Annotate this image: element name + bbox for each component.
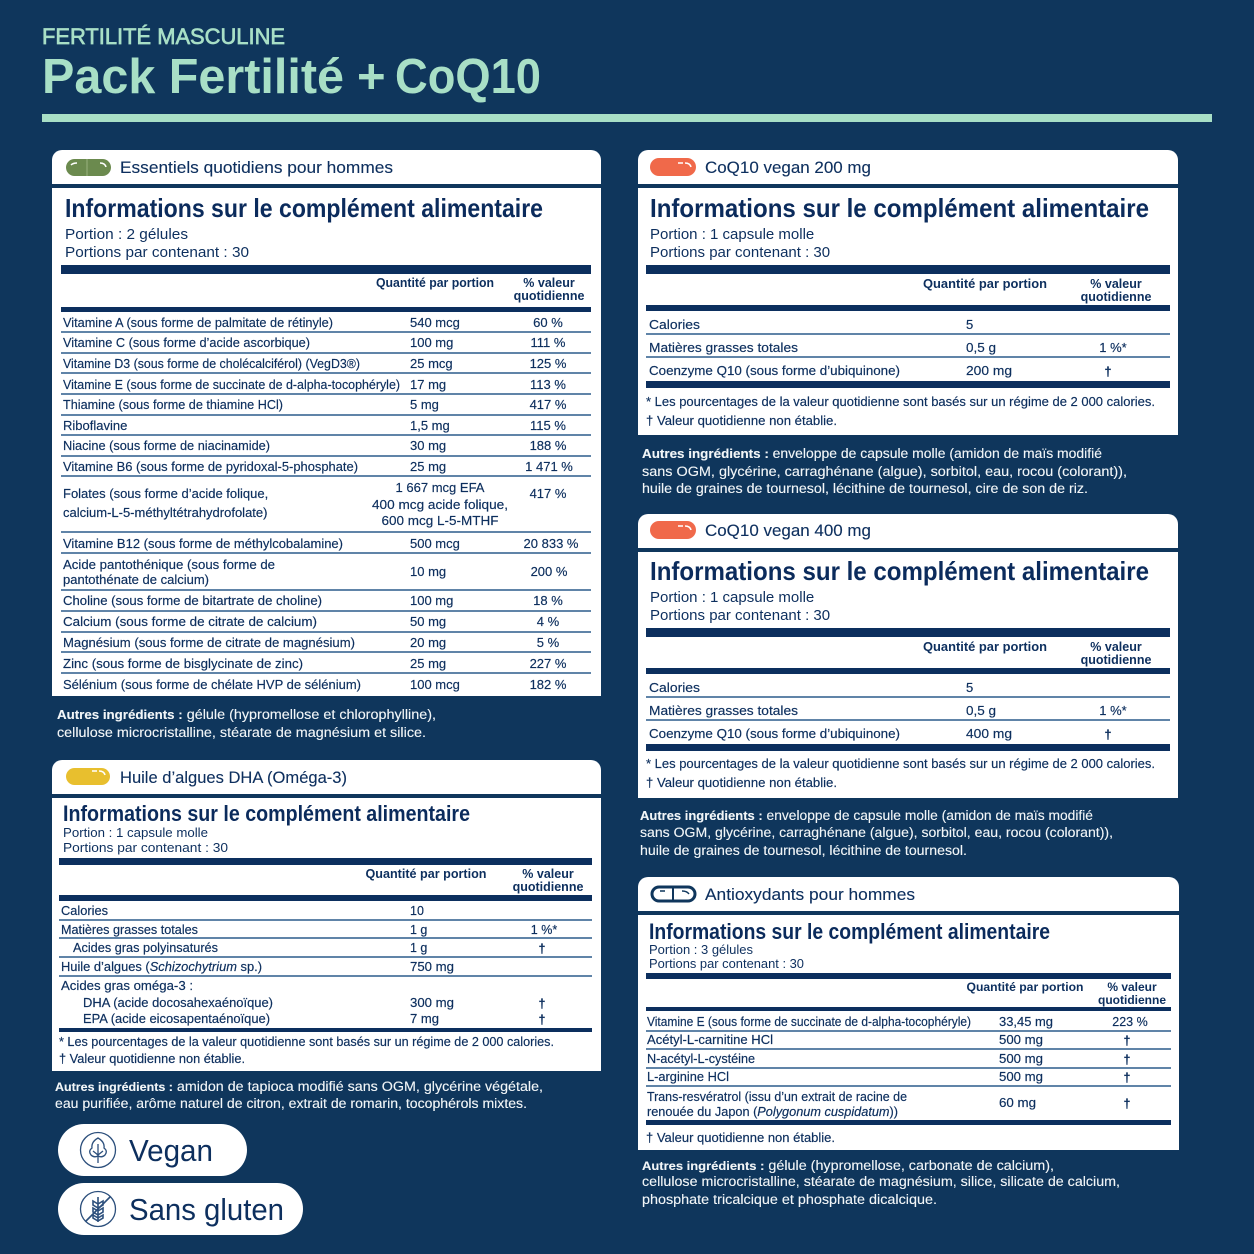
supplement facts table: Essentiels quotidiens: 227 % [530,656,567,671]
supplement facts table: Antioxydants: † [1124,1053,1131,1067]
supplement facts table: Essentiels quotidiens: 100 mg [410,335,453,350]
supplement facts table: Antioxydants: Acétyl-L-carnitine HCl [647,1033,773,1047]
supplement facts table: Essentiels quotidiens: 25 mg [410,459,446,474]
supplement facts table: Huile d'algues: 750 mg [410,960,454,974]
supplement facts table: Huile d'algues: EPA (acide eicosapentaénoïque) [83,1012,270,1026]
supplement facts table: Essentiels quotidiens [52,188,601,696]
supplement facts table: Huile d'algues: † [539,1013,546,1027]
supplement facts table: Essentiels quotidiens: quotidienne [514,289,584,303]
other ingredients: CoQ10 400 mg [640,808,1113,858]
other ingredients: Essentiels quotidiens [57,707,436,740]
supplement facts table: Essentiels quotidiens: 60 % [533,315,563,330]
supplement facts table: CoQ10 200 mg: Informations sur le complément alimentaire [650,193,1149,223]
supplement facts table: Essentiels quotidiens: Thiamine (sous forme de thiamine HCl) [63,397,283,412]
supplement facts table: Essentiels quotidiens: Riboflavine [63,418,127,433]
supplement facts table: Essentiels quotidiens: Zinc (sous forme de bisglycinate de zinc) [63,656,303,671]
supplement facts table: CoQ10 200 mg: quotidienne [1081,290,1151,304]
product header: CoQ10 400 mg [638,514,1178,548]
supplement facts table: CoQ10 400 mg: * Les pourcentages de la valeur quotidienne sont basés sur un régime de 2 000 calories. [646,756,1155,771]
supplement facts table: Antioxydants: 500 mg [999,1070,1043,1084]
product header: Essentiels quotidiens [52,150,601,184]
supplement facts table: Essentiels quotidiens: 5 % [537,635,560,650]
supplement facts table: Antioxydants: Informations sur le complément alimentaire [649,919,1050,944]
panel: Antioxydants pour hommes [638,877,1179,1207]
supplement facts table: CoQ10 400 mg: Portions par contenant : 30 [650,607,830,624]
badge: Vegan [58,1124,247,1176]
supplement facts table: Huile d'algues: Huile d’algues (Schizochytrium sp.) [61,960,262,974]
other ingredients: Huile d'algues: Autres ingrédients : amidon de tapioca modifié sans OGM, glycérine végétale, [55,1079,543,1094]
supplement facts table: Essentiels quotidiens: Portion : 2 gélules [65,226,188,243]
other ingredients: Huile d'algues [55,1079,543,1111]
supplement facts table: Essentiels quotidiens: Choline (sous forme de bitartrate de choline) [63,593,322,608]
heading: category and product title: + [357,50,386,104]
product header: Essentiels quotidiens: Essentiels quotidiens pour hommes [120,158,393,177]
supplement facts table: Antioxydants: 223 % [1112,1015,1148,1029]
supplement facts table: CoQ10 400 mg: Informations sur le complément alimentaire [650,556,1149,586]
supplement facts table: Huile d'algues: 1 %* [531,923,557,937]
supplement facts table: Huile d'algues: % valeur [522,867,574,881]
supplement facts table: Essentiels quotidiens: 1 471 % [525,459,573,474]
supplement facts table: Essentiels quotidiens: 200 % [531,564,568,579]
supplement facts table: Antioxydants: % valeur [1107,980,1157,994]
supplement facts table: Essentiels quotidiens: 100 mcg [410,677,460,692]
supplement facts table: Essentiels quotidiens: 500 mcg [410,536,460,551]
supplement facts table: Essentiels quotidiens: 25 mcg [410,356,453,371]
supplement facts table: Essentiels quotidiens: Informations sur le complément alimentaire [65,193,543,223]
supplement facts table: Antioxydants: 500 mg [999,1033,1043,1047]
supplement facts table: Antioxydants: Quantité par portion [966,980,1084,994]
supplement facts table: Essentiels quotidiens: 115 % [530,418,566,433]
panel: Essentiels quotidiens pour hommes [52,150,601,740]
supplement facts table: CoQ10 400 mg [638,552,1178,798]
supplement facts table: Antioxydants: quotidienne [1098,993,1166,1007]
supplement facts table: Huile d'algues: † [539,997,546,1011]
supplement facts table: Huile d'algues: Matières grasses totales [61,923,198,937]
supplement facts table: Antioxydants: † Valeur quotidienne non établie. [646,1131,835,1145]
supplement facts table: CoQ10 400 mg: 0,5 g [966,703,996,718]
supplement facts table: Essentiels quotidiens: 1 667 mcg EFA [396,480,485,495]
supplement facts table: CoQ10 200 mg: Portions par contenant : 30 [650,244,830,261]
supplement facts table: Antioxydants: L-arginine HCl [647,1070,729,1084]
supplement facts table: CoQ10 400 mg: Matières grasses totales [649,703,799,718]
supplement facts table: Antioxydants: N-acétyl-L-cystéine [647,1052,755,1066]
supplement facts table: Essentiels quotidiens: 17 mg [410,377,446,392]
product header: Antioxydants: Antioxydants pour hommes [705,885,915,904]
supplement facts table: CoQ10 200 mg: Portion : 1 capsule molle [650,226,814,243]
supplement facts table: Essentiels quotidiens: 417 % [530,486,567,501]
supplement facts table: Antioxydants: Portion : 3 gélules [649,943,753,957]
other ingredients: CoQ10 200 mg: huile de graines de tournesol, lécithine de tournesol, cire de son de riz. [642,481,1088,496]
supplement facts table: CoQ10 400 mg: Quantité par portion [923,640,1047,654]
supplement facts table: Antioxydants: Portions par contenant : 30 [649,957,804,971]
supplement facts table: Essentiels quotidiens: 417 % [530,397,567,412]
supplement facts table: Essentiels quotidiens: 600 mcg L-5-MTHF [382,513,499,528]
product header: Huile d'algues: Huile d’algues DHA (Oméga-3) [120,768,347,787]
supplement facts table: Huile d'algues: Acides gras polyinsaturés [73,941,218,955]
supplement facts table: Essentiels quotidiens: 1,5 mg [410,418,450,433]
supplement facts table: CoQ10 400 mg: Calories [649,680,701,695]
heading: category and product title: CoQ10 [395,50,541,104]
supplement facts table: Essentiels quotidiens: 10 mg [410,564,446,579]
other ingredients: CoQ10 400 mg: Autres ingrédients : enveloppe de capsule molle (amidon de maïs modifié [640,808,1093,823]
supplement facts table: Essentiels quotidiens: 4 % [537,614,560,629]
supplement facts table: Antioxydants: 500 mg [999,1052,1043,1066]
supplement facts table: Essentiels quotidiens: 5 mg [410,397,439,412]
supplement facts table: Essentiels quotidiens: 113 % [530,377,566,392]
supplement facts table: Huile d'algues: Quantité par portion [366,867,486,881]
supplement facts table: CoQ10 400 mg: 1 %* [1099,703,1127,718]
supplement facts table: CoQ10 400 mg: † Valeur quotidienne non établie. [646,775,837,790]
supplement facts table: Antioxydants: 60 mg [999,1096,1036,1110]
product header: Antioxydants [638,877,1179,911]
supplement facts table: Essentiels quotidiens: Vitamine C (sous forme d’acide ascorbique) [63,335,310,350]
supplement facts table: Essentiels quotidiens: 182 % [530,677,567,692]
supplement facts table: Essentiels quotidiens: 25 mg [410,656,446,671]
supplement facts table: Essentiels quotidiens: pantothénate de calcium) [63,572,209,587]
supplement facts table: Huile d'algues: 1 g [410,923,427,937]
supplement facts table: Essentiels quotidiens: 400 mcg acide folique, [372,497,508,512]
heading: category and product title [42,24,541,104]
supplement facts table: CoQ10 200 mg: 0,5 g [966,340,996,355]
supplement facts table: Huile d'algues: Portions par contenant : 30 [63,840,228,855]
supplement facts table: Essentiels quotidiens: Vitamine D3 (sous forme de cholécalciférol) (VegD3®) [63,356,360,371]
other ingredients: CoQ10 200 mg: Autres ingrédients : enveloppe de capsule molle (amidon de maïs modifié [642,446,1102,461]
badge: Sans gluten [58,1183,303,1235]
supplement facts table: Antioxydants: Vitamine E (sous forme de succinate de d-alpha-tocophéryle) [647,1015,971,1029]
supplement facts table: Essentiels quotidiens: Sélénium (sous forme de chélate HVP de sélénium) [63,677,361,692]
supplement facts table: Antioxydants: † [1124,1097,1131,1111]
supplement facts table: Essentiels quotidiens: Magnésium (sous forme de citrate de magnésium) [63,635,355,650]
supplement facts table: Huile d'algues: 7 mg [410,1012,439,1026]
supplement facts table: CoQ10 200 mg: Quantité par portion [923,277,1047,291]
other ingredients: Antioxydants [642,1158,1120,1207]
supplement facts table: Essentiels quotidiens: Niacine (sous forme de niacinamide) [63,438,270,453]
supplement facts table: Essentiels quotidiens: Quantité par portion [376,276,494,290]
other ingredients: Essentiels quotidiens: cellulose microcristalline, stéarate de magnésium et silice. [57,725,426,740]
supplement facts table: Antioxydants: renouée du Japon (Polygonum cuspidatum)) [647,1105,898,1119]
supplement facts table: Huile d'algues: * Les pourcentages de la valeur quotidienne sont basés sur un régime de 2 000 calories. [59,1035,554,1049]
supplement facts table: Huile d'algues [52,798,601,1071]
product header: CoQ10 200 mg [638,150,1178,184]
panel: CoQ10 vegan 200 mg [638,150,1178,496]
product header: CoQ10 200 mg: CoQ10 vegan 200 mg [705,158,871,177]
supplement facts table: Essentiels quotidiens: 18 % [533,593,563,608]
other ingredients: Essentiels quotidiens: Autres ingrédients : gélule (hypromellose et chlorophylline), [57,707,436,722]
other ingredients: CoQ10 200 mg: sans OGM, glycérine, carraghénane (algue), sorbitol, eau, rocou (colorant)), [642,464,1127,479]
icon: crossed wheat [80,1192,116,1226]
heading: category and product title: FERTILITÉ MASCULINE [42,24,285,49]
supplement facts table: Essentiels quotidiens: Vitamine E (sous forme de succinate de d-alpha-tocophéryle) [63,377,400,392]
supplement facts table: Antioxydants: † [1124,1071,1131,1085]
heading: category and product title: Pack Fertilité [42,50,344,104]
supplement facts table: CoQ10 400 mg: 5 [966,680,973,695]
supplement facts table: Huile d'algues: 1 g [410,941,427,955]
supplement facts table: CoQ10 200 mg: Calories [649,317,701,332]
badge: Vegan: Vegan [129,1134,213,1168]
other ingredients: Antioxydants: cellulose microcristalline, stéarate de magnésium, silice, silicate de calcium, [642,1174,1120,1189]
supplement facts table: CoQ10 200 mg: 1 %* [1099,340,1127,355]
supplement facts table: Essentiels quotidiens: 20 833 % [524,536,579,551]
supplement facts table: Essentiels quotidiens: Calcium (sous forme de citrate de calcium) [63,614,317,629]
supplement facts table: Essentiels quotidiens: Portions par contenant : 30 [65,244,249,261]
supplement facts table: Essentiels quotidiens: Vitamine B6 (sous forme de pyridoxal-5-phosphate) [63,459,358,474]
supplement facts table: Huile d'algues: Calories [61,904,108,918]
supplement facts table: Essentiels quotidiens: 540 mcg [410,315,460,330]
supplement facts table: Antioxydants: Trans-resvératrol (issu d’un extrait de racine de [647,1090,907,1104]
supplement facts table: Huile d'algues: Acides gras oméga-3 : [61,979,193,993]
supplement facts table: Huile d'algues: 300 mg [410,996,454,1010]
supplement facts table: Essentiels quotidiens: Folates (sous forme d’acide folique, [63,486,268,501]
other ingredients: Huile d'algues: eau purifiée, arôme naturel de citron, extrait de romarin, tocophérols mixtes. [55,1096,527,1111]
other ingredients: CoQ10 400 mg: sans OGM, glycérine, carraghénane (algue), sorbitol, eau, rocou (colorant)), [640,825,1113,840]
supplement facts table: CoQ10 200 mg: % valeur [1090,277,1142,291]
supplement facts table: Huile d'algues: quotidienne [513,880,583,894]
supplement facts table: Essentiels quotidiens: % valeur [523,276,575,290]
supplement facts table: Huile d'algues: DHA (acide docosahexaénoïque) [83,996,273,1010]
supplement facts table: Huile d'algues: Informations sur le complément alimentaire [63,801,470,826]
supplement facts table: Essentiels quotidiens: 111 % [531,335,566,350]
supplement facts table: Huile d'algues: † [539,942,546,956]
supplement facts table: CoQ10 200 mg [638,188,1178,435]
supplement facts table: CoQ10 400 mg: % valeur [1090,640,1142,654]
supplement facts table: Antioxydants: 33,45 mg [999,1015,1053,1029]
other ingredients: Antioxydants: phosphate tricalcique et phosphate dicalcique. [642,1192,937,1207]
panel: CoQ10 vegan 400 mg [638,514,1178,858]
supplement facts table: CoQ10 200 mg: Coenzyme Q10 (sous forme d’ubiquinone) [649,363,900,378]
badge: Sans gluten: Sans gluten [129,1193,284,1227]
panel: Huile d'algues DHA [52,760,601,1111]
supplement facts table: CoQ10 400 mg: quotidienne [1081,653,1151,667]
supplement facts table: CoQ10 200 mg: Matières grasses totales [649,340,799,355]
supplement facts table: Huile d'algues: † Valeur quotidienne non établie. [59,1052,245,1066]
supplement facts table: Essentiels quotidiens: calcium-L-5-méthyltétrahydrofolate) [63,505,267,520]
supplement facts table: CoQ10 200 mg: 5 [966,317,973,332]
other ingredients: CoQ10 200 mg [642,446,1127,496]
supplement facts table: CoQ10 400 mg: 400 mg [966,726,1012,741]
supplement facts table: Essentiels quotidiens: Vitamine B12 (sous forme de méthylcobalamine) [63,536,343,551]
product header: Huile d'algues [52,760,601,794]
other ingredients: Antioxydants: Autres ingrédients : gélule (hypromellose, carbonate de calcium), [642,1158,1054,1173]
supplement facts table: CoQ10 200 mg: † Valeur quotidienne non établie. [646,413,837,428]
supplement facts table: CoQ10 200 mg: † [1104,364,1112,379]
supplement facts table: Antioxydants: † [1124,1034,1131,1048]
product header: CoQ10 400 mg: CoQ10 vegan 400 mg [705,521,871,540]
supplement facts table: Huile d'algues: 10 [410,904,424,918]
supplement facts table: CoQ10 200 mg: * Les pourcentages de la valeur quotidienne sont basés sur un régime de 2 000 calories. [646,394,1155,409]
supplement facts table: CoQ10 400 mg: Coenzyme Q10 (sous forme d’ubiquinone) [649,726,900,741]
supplement facts table: CoQ10 400 mg: † [1104,727,1112,742]
supplement facts table: Essentiels quotidiens: 50 mg [410,614,446,629]
icon: leaf [80,1132,116,1168]
supplement facts table: Antioxydants [638,915,1179,1150]
supplement facts table: Essentiels quotidiens: 125 % [530,356,567,371]
supplement facts table: CoQ10 200 mg: 200 mg [966,363,1012,378]
supplement facts table: Essentiels quotidiens: Acide pantothénique (sous forme de [63,557,275,572]
supplement facts table: Huile d'algues: Portion : 1 capsule molle [63,825,208,840]
supplement facts table: Essentiels quotidiens: 100 mg [410,593,453,608]
supplement facts table: Essentiels quotidiens: 30 mg [410,438,446,453]
supplement facts table: Essentiels quotidiens: Vitamine A (sous forme de palmitate de rétinyle) [63,315,333,330]
other ingredients: CoQ10 400 mg: huile de graines de tournesol, lécithine de tournesol. [640,843,967,858]
supplement facts table: Essentiels quotidiens: 20 mg [410,635,446,650]
supplement facts table: Essentiels quotidiens: 188 % [530,438,567,453]
supplement facts table: CoQ10 400 mg: Portion : 1 capsule molle [650,589,814,606]
